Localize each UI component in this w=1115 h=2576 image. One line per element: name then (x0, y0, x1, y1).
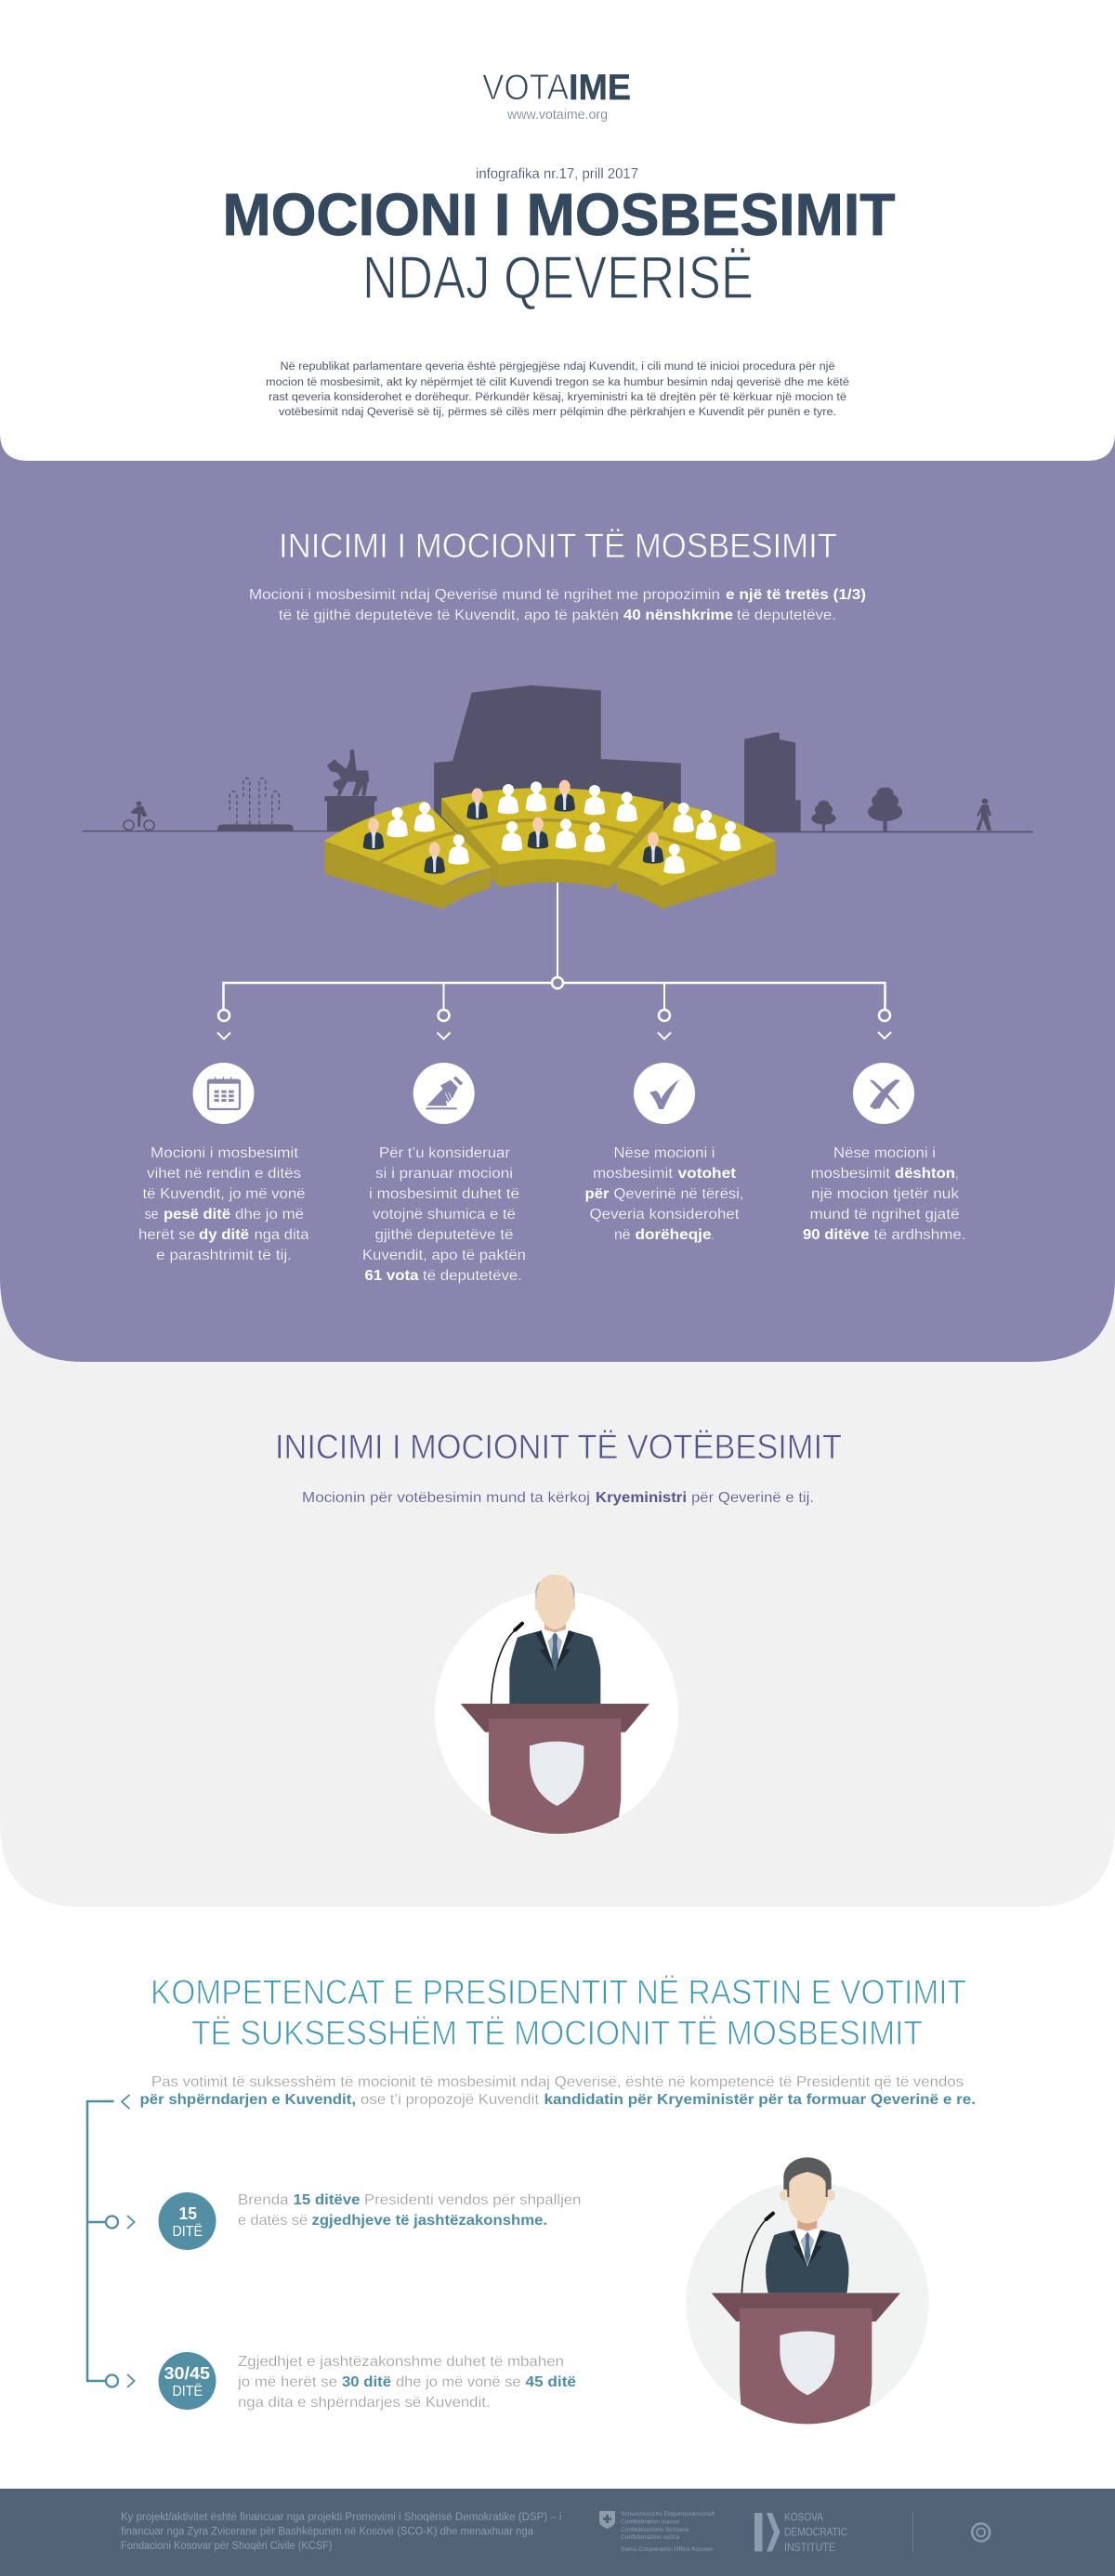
text: 30/45 days (237, 2354, 576, 2411)
text: who can propose: 40 nënshkrime (623, 608, 733, 623)
text: first outcome: e parashtrimit të tij. (156, 1248, 292, 1263)
text: third outcome: dorëheqje (636, 1227, 712, 1243)
logo: Swiss Cooperation Office (599, 2511, 715, 2553)
text: first outcome: të Kuvendit, jo më vonë (143, 1186, 305, 1202)
heading: motion of no confidence: INICIMI I MOCIONIT TË MOSBESIMIT (279, 527, 837, 565)
badge: 30/45 days: DITË (173, 2384, 203, 2399)
text: first outcome: vihet në rendin e ditës (147, 1166, 301, 1182)
text: third outcome: në (614, 1227, 630, 1243)
badge: 15 days: 15 (178, 2204, 197, 2223)
text: who can request: Mocionin për votëbesimin mund ta kërkoj (302, 1490, 590, 1506)
text: who can propose: Mocioni i mosbesimit ndaj Qeverisë mund të ngrihet me propozimin (249, 587, 720, 603)
title: MOCIONI I MOSBESIMIT (223, 181, 896, 248)
text: first outcome: herët se (138, 1227, 195, 1243)
text: introduction: mocion të mosbesimit, akt ky nëpërmjet të cilit Kuvendi tregon se ka humbur besimin ndaj qeverisë dhe me këtë (266, 377, 849, 388)
text: 30/45 days: dhe jo më vonë se (396, 2374, 521, 2390)
text: third outcome: mosbesimit (593, 1166, 674, 1182)
text: 15 days: zgjedhjeve të jashtëzakonshme. (312, 2213, 547, 2229)
text: fourth outcome: të ardhshme. (873, 1227, 966, 1243)
text: who can propose: të deputetëve. (737, 608, 836, 623)
illustration: city skyline (83, 686, 1033, 833)
text: introduction: Në republikat parlamentare qeveria është përgjegjëse ndaj Kuvendit, i cili mund të inicioi procedura për një (281, 361, 834, 373)
heading: president's competences: KOMPETENCAT E PRESIDENTIT NË RASTIN E VOTIMIT (151, 1973, 966, 2011)
text: second outcome: Kuvendit, apo të paktën (362, 1248, 526, 1263)
text: 15 days: e datës së (238, 2213, 308, 2229)
column: motion fails (803, 1063, 966, 1243)
text: funding statement (121, 2512, 561, 2552)
logo: round partner mark (972, 2523, 990, 2542)
text: 30/45 days: nga dita e shpërndarjes së Kuvendit. (238, 2395, 491, 2411)
connector: timeline bracket (87, 2095, 134, 2387)
logo: Swiss Cooperation Office: Swiss Cooperation Office Kosovo (621, 2546, 713, 2553)
text: second outcome: votojnë shumica e të (373, 1207, 516, 1223)
text: fourth outcome: mosbesimit (810, 1166, 891, 1182)
illustration: prime minister at podium (435, 1575, 678, 1835)
text: third outcome: Qeveria konsiderohet (589, 1207, 740, 1223)
text: competence summary: kandidatin për Kryeministër për ta formuar Qeverinë e re. (544, 2092, 976, 2108)
text: funding statement: Fondacioni Kosovar për Shoqëri Civile (KCSF) (121, 2541, 333, 2552)
text: second outcome: si i pranuar mocioni (375, 1166, 513, 1182)
logo: VOTAIME: VOTA (482, 68, 569, 108)
text: third outcome: . (712, 1227, 714, 1243)
text: who can propose (249, 587, 866, 623)
panel: president's competences (87, 1973, 976, 2425)
logo: Kosova Democratic Institute: INSTITUTE (784, 2541, 835, 2554)
text: who can propose: e një të tretës (1/3) (726, 587, 866, 603)
logo: Kosova Democratic Institute: DEMOCRATIC (784, 2525, 847, 2538)
illustration: parliament seating (324, 780, 776, 909)
text: funding statement: financuar nga Zyra Zvicerane për Bashkëpunim në Kosovë (SCO-K) dhe menaxhuar nga (121, 2527, 534, 2538)
text: 15 days (238, 2192, 582, 2229)
badge: 30/45 days (158, 2352, 216, 2410)
text: third outcome: Qeverinë në tërësi, (613, 1186, 743, 1202)
text: third outcome: votohet (678, 1166, 736, 1182)
text: first outcome: dhe jo më (235, 1207, 304, 1223)
text: first outcome (138, 1145, 309, 1263)
column: motion passes (585, 1063, 743, 1243)
text: competence summary: për shpërndarjen e Kuvendit, (139, 2092, 356, 2108)
subtitle: NDAJ QEVERISË (362, 243, 754, 311)
text: 15 days: 15 ditëve (294, 2192, 361, 2208)
logo: Kosova Democratic Institute: KOSOVA (784, 2510, 823, 2523)
logo: Kosova Democratic Institute (754, 2510, 847, 2554)
column: motion scheduled (138, 1063, 309, 1263)
logo: Swiss Cooperation Office: Schweizerische Eidgenossenschaft (621, 2511, 715, 2517)
text: introduction: rast qeveria konsiderohet e dorëhequr. Përkundër kësaj, kryeministri ka të drejtën për të kërkuar një mocion të (269, 392, 846, 403)
logo: Swiss Cooperation Office: Confédération suisse (621, 2519, 679, 2525)
text: fourth outcome: mund të ngrihet gjatë (810, 1207, 959, 1223)
logo: Swiss Cooperation Office: Confederaziun svizra (621, 2534, 679, 2541)
badge: 15 days: DITË (173, 2224, 203, 2240)
panel: vote of confidence (0, 1301, 1115, 1907)
heading: president's competences: TË SUKSESSHËM TË MOCIONIT TË MOSBESIMIT (191, 2014, 923, 2052)
panel: initiating the motion of no confidence (0, 0, 1115, 1362)
text: 15 days: Presidenti vendos për shpalljen (364, 2192, 582, 2208)
text: first outcome: nga dita (255, 1227, 309, 1243)
text: competence summary: Pas votimit të suksesshëm të mocionit të mosbesimit ndaj Qeverisë, është në kompetencë të Presidentit që të vendos (151, 2074, 964, 2090)
text: second outcome: gjithë deputetëve të (375, 1227, 513, 1243)
text: 15 days: Brenda (238, 2192, 289, 2208)
text: competence summary: ose t’i propozojë Kuvendit (361, 2092, 540, 2108)
text: fourth outcome: , (955, 1166, 959, 1182)
text: second outcome: i mosbesimit duhet të (369, 1186, 519, 1202)
text: website: www.votaime.org (506, 108, 608, 123)
illustration: president at podium (686, 2157, 929, 2425)
text: fourth outcome: Nëse mocioni i (833, 1145, 936, 1161)
connector: branching lines (217, 883, 891, 1039)
text: third outcome (585, 1145, 743, 1243)
text: 30/45 days: Zgjedhjet e jashtëzakonshme duhet të mbahen (238, 2354, 564, 2370)
logo: VOTAIME: IME (569, 68, 631, 108)
text: fourth outcome: dështon (895, 1166, 955, 1182)
text: second outcome: të deputetëve. (423, 1268, 522, 1284)
text: fourth outcome: 90 ditëve (803, 1227, 870, 1243)
icon: check mark (634, 1063, 695, 1124)
icon: calendar (193, 1063, 255, 1124)
logo: VOTAIME (482, 68, 631, 108)
column: accepted with 61 votes (362, 1063, 526, 1284)
icon: cross mark (853, 1063, 914, 1124)
badge: 15 days (158, 2192, 216, 2250)
panel: footer (0, 2489, 1115, 2576)
logo: Swiss Cooperation Office: Confederazione Svizzera (621, 2527, 689, 2533)
text: second outcome: Për t’u konsideruar (379, 1145, 510, 1161)
text: introduction: votëbesimit ndaj Qeverisë së tij, përmes së cilës merr pëlqimin dhe përkrahjen e Kuvendit për punën e tyre. (279, 407, 836, 418)
text: introduction (266, 361, 849, 418)
text: third outcome: Nëse mocioni i (613, 1145, 715, 1161)
text: third outcome: për (585, 1186, 610, 1202)
text: second outcome (362, 1145, 526, 1284)
icon: ballot in hand (413, 1063, 475, 1124)
text: competence summary (139, 2074, 976, 2108)
text: who can request: Kryeministri (596, 1490, 687, 1506)
text: 30/45 days: jo më herët se (237, 2374, 337, 2390)
text: first outcome: se (145, 1207, 158, 1223)
text: funding statement: Ky projekt/aktivitet është financuar nga projekti Promovimi i Shoqërisë Demokratike (DSP) – i (121, 2512, 561, 2523)
text: who can propose: të të gjithë deputetëve të Kuvendit, apo të paktën (279, 608, 619, 623)
badge: 30/45 days: 30/45 (164, 2364, 210, 2383)
heading: president's competences (151, 1973, 966, 2052)
text: first outcome: Mocioni i mosbesimit (151, 1145, 299, 1161)
heading: vote of confidence: INICIMI I MOCIONIT TË VOTËBESIMIT (275, 1428, 842, 1466)
text: who can request: për Qeverinë e tij. (691, 1490, 814, 1506)
text: fourth outcome (803, 1145, 966, 1243)
text: first outcome: pesë ditë (164, 1207, 230, 1223)
text: 30/45 days: 45 ditë (526, 2374, 576, 2390)
text: second outcome: 61 vota (364, 1268, 419, 1284)
text: who can request (302, 1490, 814, 1506)
panel: header (0, 0, 1115, 461)
text: fourth outcome: një mocion tjetër nuk (811, 1186, 959, 1202)
text: first outcome: dy ditë (199, 1227, 249, 1243)
text: 30/45 days: 30 ditë (342, 2374, 391, 2390)
text: issue line: infografika nr.17, prill 2017 (476, 166, 638, 182)
